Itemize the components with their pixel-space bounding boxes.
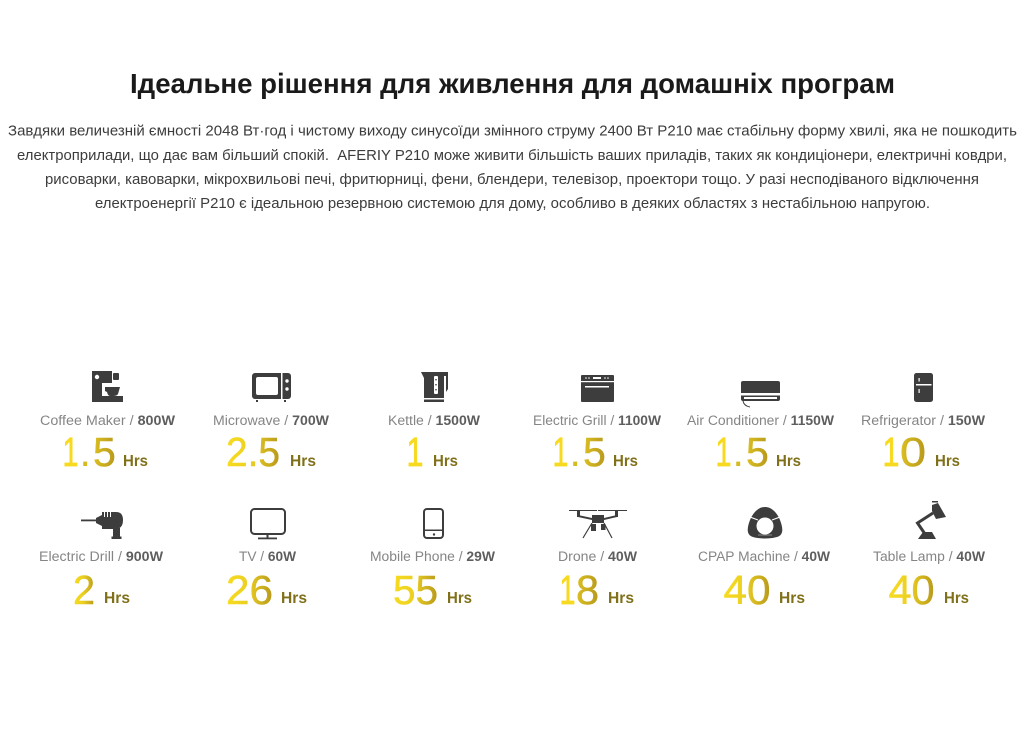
icon: CPAP machine bbox=[748, 507, 782, 538]
item: microwave: Microwave / 700W bbox=[213, 413, 329, 428]
item: CPAP machine: Hrs bbox=[779, 590, 805, 607]
item: electric grill: 5 bbox=[583, 429, 606, 475]
item: air conditioner bbox=[687, 381, 834, 475]
description text bbox=[8, 124, 1017, 212]
item: CPAP machine bbox=[698, 507, 830, 613]
icon: electric grill bbox=[581, 375, 614, 402]
item: TV: Hrs bbox=[281, 590, 307, 607]
item: coffee maker: Hrs bbox=[123, 453, 148, 470]
item: table lamp: 40 bbox=[888, 567, 934, 613]
item: electric grill: . bbox=[570, 429, 581, 475]
item: mobile phone bbox=[370, 509, 495, 613]
item: coffee maker bbox=[40, 371, 175, 475]
item: electric drill: Electric Drill / 900W bbox=[39, 549, 163, 564]
item: air conditioner: Hrs bbox=[776, 453, 801, 470]
item: refrigerator: Hrs bbox=[935, 453, 960, 470]
item: TV: 26 bbox=[226, 567, 273, 613]
item: air conditioner: 5 bbox=[746, 429, 769, 475]
item: CPAP machine: 40 bbox=[724, 567, 770, 613]
item: mobile phone: Hrs bbox=[447, 590, 472, 607]
item: table lamp bbox=[873, 501, 985, 613]
item: kettle: Kettle / 1500W bbox=[388, 413, 480, 428]
item: coffee maker: . bbox=[80, 429, 91, 475]
item: electric grill: 1 bbox=[552, 429, 568, 475]
item: kettle: 1 bbox=[406, 429, 424, 475]
item: drone: Hrs bbox=[608, 590, 634, 607]
item: refrigerator bbox=[861, 373, 985, 475]
description text: електроприлади, що дає вам більший спокій. AFERIY P210 може живити більшість ваших приладів, таких як кондиціонери, електричні ковдри, bbox=[17, 148, 1007, 164]
item: drone: 8 bbox=[576, 567, 599, 613]
item: drone bbox=[558, 510, 637, 613]
icon: table lamp bbox=[918, 501, 946, 539]
icon: mobile phone bbox=[424, 509, 443, 538]
item: coffee maker: Coffee Maker / 800W bbox=[40, 413, 175, 428]
item: table lamp: Table Lamp / 40W bbox=[873, 549, 985, 564]
description text: рисоварки, кавоварки, мікрохвильові печі, фритюрниці, фени, блендери, телевізор, проектори тощо. У разі несподіваного відключення bbox=[45, 172, 979, 188]
icon: kettle bbox=[421, 372, 448, 402]
icon: electric drill bbox=[81, 512, 123, 539]
item: air conditioner: 1 bbox=[716, 429, 732, 475]
item: electric grill: Hrs bbox=[613, 453, 638, 470]
item: microwave: Hrs bbox=[290, 453, 316, 470]
item: air conditioner: Air Conditioner / 1150W bbox=[687, 413, 834, 428]
item: refrigerator: 0 bbox=[900, 429, 926, 475]
item: mobile phone: 55 bbox=[393, 567, 438, 613]
item: electric grill bbox=[533, 375, 661, 475]
item: table lamp: Hrs bbox=[944, 590, 969, 607]
item: electric drill: Hrs bbox=[104, 590, 130, 607]
item: TV bbox=[226, 509, 307, 613]
title: Ідеальне рішення для живлення для домашніх програм bbox=[130, 68, 895, 99]
item: air conditioner: . bbox=[732, 429, 744, 475]
item: microwave: 2.5 bbox=[226, 429, 280, 475]
item: drone: Drone / 40W bbox=[558, 549, 637, 564]
item: coffee maker: 1 bbox=[62, 429, 78, 475]
description text: електроенергії P210 є ідеальною резервною системою для дому, особливо в деяких областях з нестабільною напругою. bbox=[95, 196, 930, 212]
icon: drone bbox=[569, 510, 627, 538]
item: CPAP machine: CPAP Machine / 40W bbox=[698, 549, 830, 564]
item: coffee maker: 5 bbox=[93, 429, 116, 475]
icon: TV bbox=[251, 509, 285, 539]
item: refrigerator: 1 bbox=[882, 429, 900, 475]
item: microwave bbox=[213, 373, 329, 475]
item: TV: TV / 60W bbox=[239, 549, 296, 564]
item: kettle bbox=[388, 372, 480, 475]
item: mobile phone: Mobile Phone / 29W bbox=[370, 549, 495, 564]
icon: coffee maker bbox=[92, 371, 123, 402]
icon: microwave bbox=[252, 373, 291, 402]
item: drone: 1 bbox=[560, 567, 576, 613]
item: electric drill bbox=[39, 512, 163, 613]
item: electric grill: Electric Grill / 1100W bbox=[533, 413, 661, 428]
icon: refrigerator bbox=[914, 373, 933, 402]
item: refrigerator: Refrigerator / 150W bbox=[861, 413, 985, 428]
item: electric drill: 2 bbox=[73, 567, 95, 613]
description text: Завдяки величезній ємності 2048 Вт·год і чистому виходу синусоїди змінного струму 2400 Вт P210 має стабільну форму хвилі, яка не пошкодить bbox=[8, 124, 1017, 140]
item: kettle: Hrs bbox=[433, 453, 458, 470]
icon: air conditioner bbox=[741, 381, 780, 407]
